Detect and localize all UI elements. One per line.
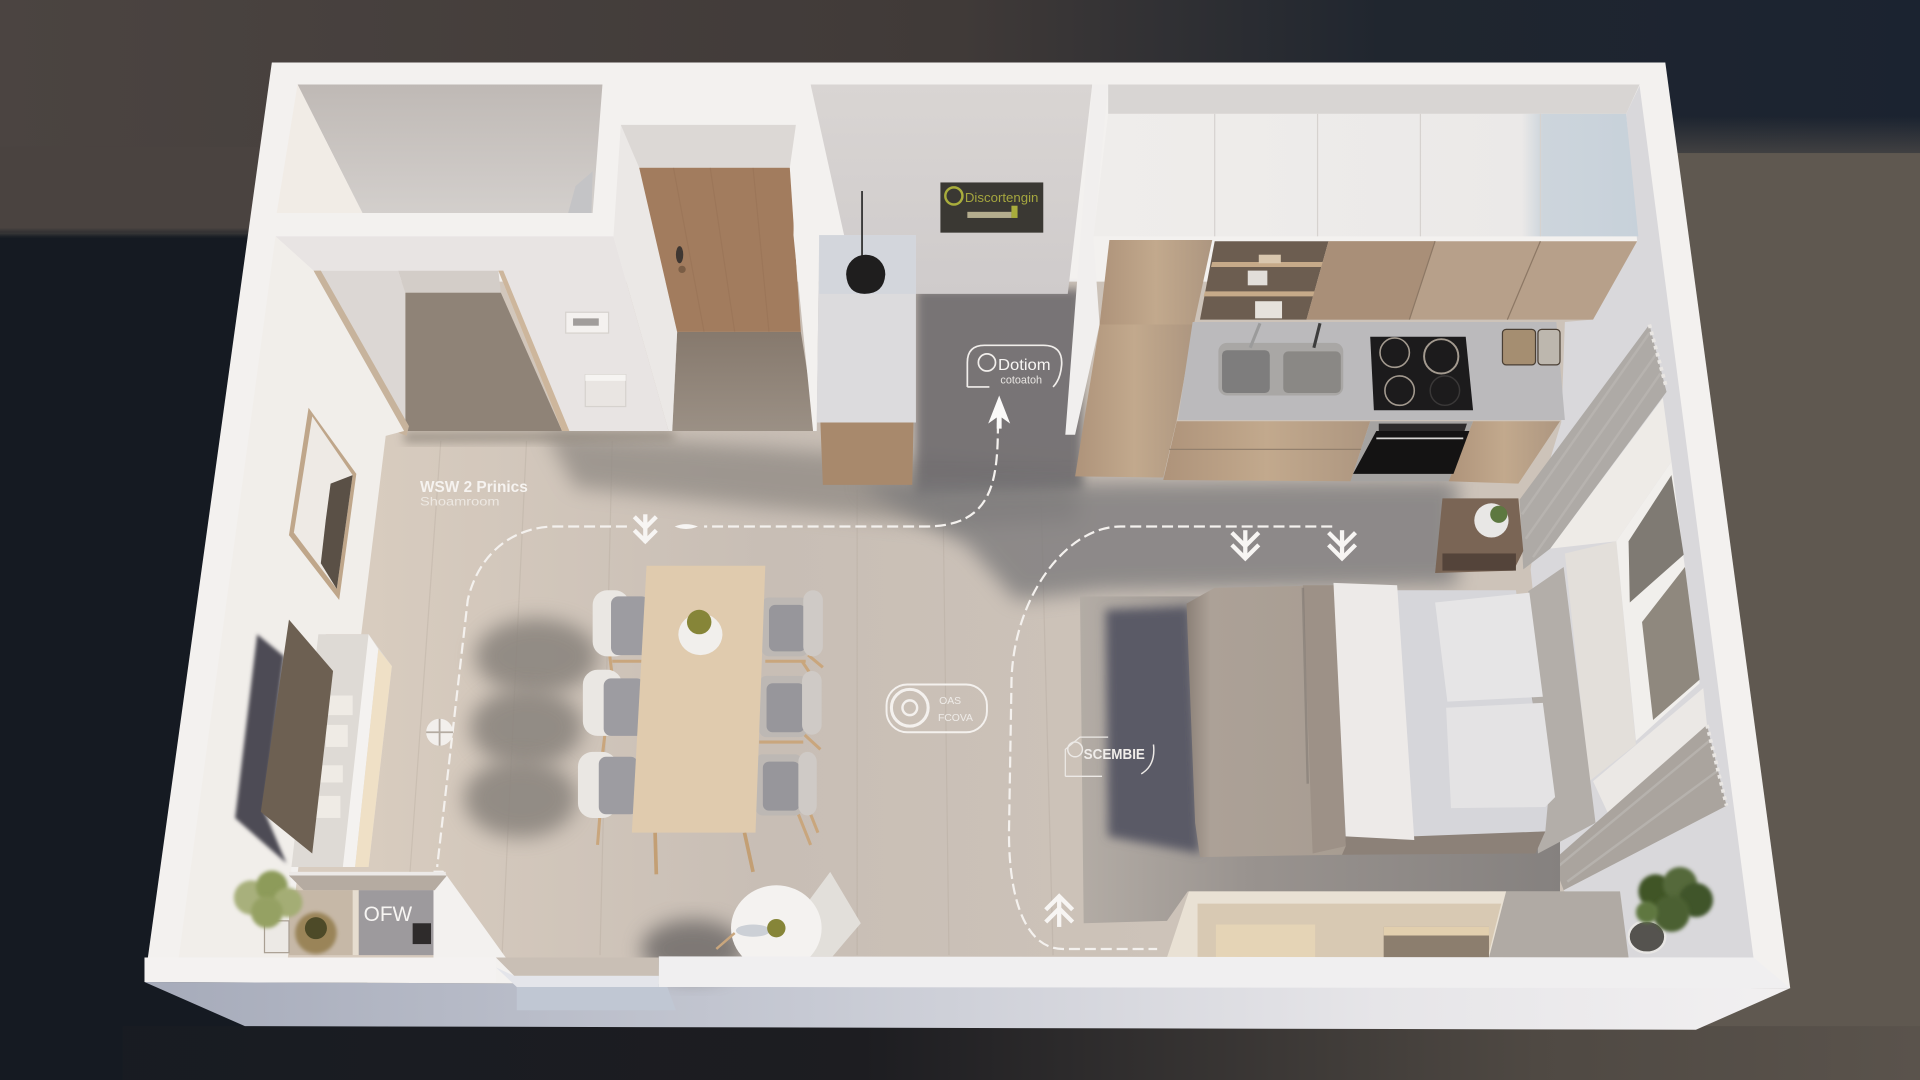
dashed route around the bedroom <box>1009 527 1332 949</box>
living wall art <box>289 408 356 600</box>
vase and plant <box>678 610 722 655</box>
label: circular badge: FCOVA <box>938 713 973 724</box>
table legs <box>655 833 753 874</box>
countertop <box>1178 322 1565 420</box>
lower vent <box>585 375 626 407</box>
wall sign <box>940 182 1043 233</box>
lower window pane <box>1642 567 1700 720</box>
dashed route to the label <box>704 422 998 527</box>
lower curtain <box>1553 725 1727 890</box>
route marker <box>426 719 453 746</box>
label OFW: OFW <box>364 903 413 926</box>
bottom desk <box>1167 891 1629 958</box>
duvet <box>1187 585 1346 857</box>
potted plant right <box>1629 867 1713 953</box>
label: living room title: Shoamroom <box>420 496 500 509</box>
woven basket plant <box>295 912 337 954</box>
window frame <box>1616 462 1700 741</box>
white fold <box>1333 583 1414 840</box>
label: bedroom badge <box>1065 737 1154 776</box>
tv shadow on wall <box>235 634 287 863</box>
building shell <box>144 62 1790 1030</box>
hob <box>1370 337 1473 410</box>
headboard <box>1528 567 1596 853</box>
back room behind opening <box>316 271 562 431</box>
floor shadows <box>404 289 1457 978</box>
entrance arrow <box>1046 896 1073 927</box>
back wall with sign <box>793 84 1108 435</box>
window and curtains <box>1520 324 1727 890</box>
chairs <box>578 590 823 845</box>
sink <box>1218 323 1343 396</box>
arrow up to label <box>988 396 1010 429</box>
bathroom niche <box>277 84 602 213</box>
double arrow centre <box>634 514 656 542</box>
base cabinets <box>1163 421 1560 484</box>
label: kitchen route badge: Dotiom <box>998 357 1051 374</box>
label: circular badge <box>887 684 987 732</box>
left wall <box>179 236 404 958</box>
label: living room title: WSW 2 Prinics <box>420 479 528 496</box>
label: kitchen route badge: cotoatoh <box>1000 374 1042 386</box>
label: kitchen route badge <box>967 345 1062 387</box>
pendant lamp and column <box>817 191 916 485</box>
bedroom arrow one <box>1232 530 1259 558</box>
bedside table <box>1435 498 1523 573</box>
kitchen <box>1075 84 1640 484</box>
arrow tip <box>675 524 698 529</box>
door alcove and wooden door <box>621 125 801 332</box>
alcove floor <box>672 332 817 431</box>
upper window pane <box>1629 475 1684 602</box>
bed shadow <box>1106 606 1200 853</box>
open shelves <box>1200 241 1329 320</box>
pillows <box>1435 593 1555 808</box>
round side table and chair <box>716 872 861 971</box>
floor <box>288 282 1592 958</box>
dashed route on the left <box>437 527 627 867</box>
bedroom arrow two <box>1329 530 1356 558</box>
potted plant left <box>234 871 302 953</box>
upper vent <box>566 312 609 333</box>
sheet <box>1397 590 1548 836</box>
oven <box>1351 421 1473 481</box>
wall sign: Discortengin <box>965 190 1038 205</box>
dining area <box>578 566 823 874</box>
bottom-left niche <box>234 871 506 967</box>
label: living room title <box>420 479 528 509</box>
tv and media console <box>261 620 392 867</box>
upper curtain <box>1520 324 1667 569</box>
bed <box>1187 567 1596 857</box>
right wall <box>1531 86 1753 958</box>
bedroom rug <box>1080 596 1560 923</box>
label: circular badge: OAS <box>939 696 961 707</box>
label: bedroom badge: SCEMBIE <box>1084 747 1145 763</box>
counter appliances <box>1502 329 1560 365</box>
bottom wall and door threshold <box>144 956 1790 1010</box>
partition block with vents <box>276 125 677 436</box>
table <box>632 566 765 833</box>
